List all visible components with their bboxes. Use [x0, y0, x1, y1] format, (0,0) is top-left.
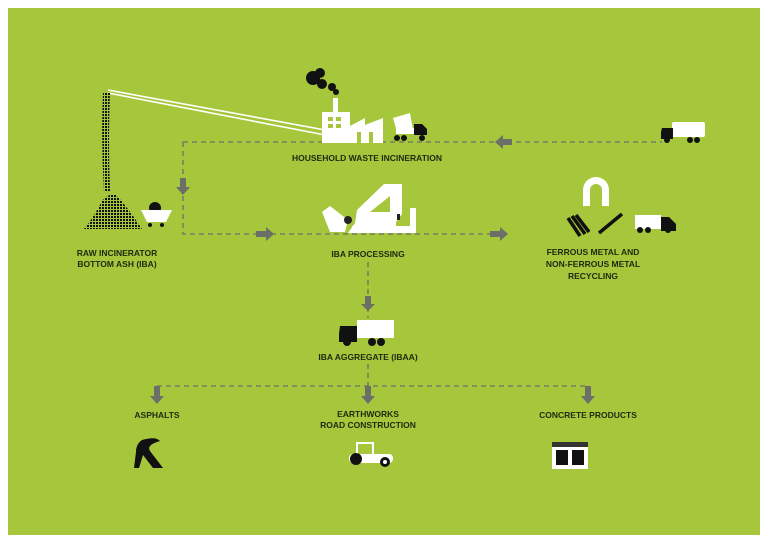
arrow: right to metal recycling [490, 227, 508, 241]
text: asphalts: ASPHALTS [134, 410, 180, 420]
text: iba aggregate: IBA AGGREGATE (IBAA) [318, 352, 418, 362]
arrow: down to aggregate [361, 296, 375, 311]
text: earthworks: ROAD CONSTRUCTION [320, 420, 416, 430]
text: earthworks: EARTHWORKS [337, 409, 399, 419]
icon: road roller [349, 443, 393, 467]
text: metal recycling: NON-FERROUS METAL [546, 259, 640, 269]
text: raw incinerator bottom ash: BOTTOM ASH (IBA) [77, 259, 157, 269]
icon: smoke [306, 68, 339, 95]
icon: conveyor [108, 90, 325, 135]
icon: concrete block [552, 442, 588, 469]
icon: collection truck top right [661, 122, 705, 143]
icon: factory [322, 98, 383, 143]
arrow: down to asphalts [150, 386, 164, 404]
arrow: down to bottom ash line [176, 178, 190, 195]
text: metal recycling: RECYCLING [568, 271, 618, 281]
arrow: left from waste truck [495, 135, 512, 149]
icon: recycling truck [635, 215, 676, 233]
icon: ash stream and pile [84, 92, 142, 229]
arrow: right to processing [256, 227, 274, 241]
title: household waste incineration: HOUSEHOLD WASTE INCINERATION [292, 153, 442, 163]
text: raw incinerator bottom ash: RAW INCINERATOR [77, 248, 157, 258]
icon: processing plant [322, 184, 416, 233]
icon: aggregate truck [339, 320, 394, 346]
text: concrete products: CONCRETE PRODUCTS [539, 410, 637, 420]
text: metal recycling: FERROUS METAL AND [547, 247, 639, 257]
arrow: down to earthworks [361, 386, 375, 404]
text: iba processing: IBA PROCESSING [331, 249, 405, 259]
icon: road [134, 438, 163, 468]
icon: magnet and metals [568, 177, 622, 236]
icon: tipper truck [393, 113, 427, 141]
icon: cart [141, 202, 172, 227]
arrow: down to concrete [581, 386, 595, 404]
